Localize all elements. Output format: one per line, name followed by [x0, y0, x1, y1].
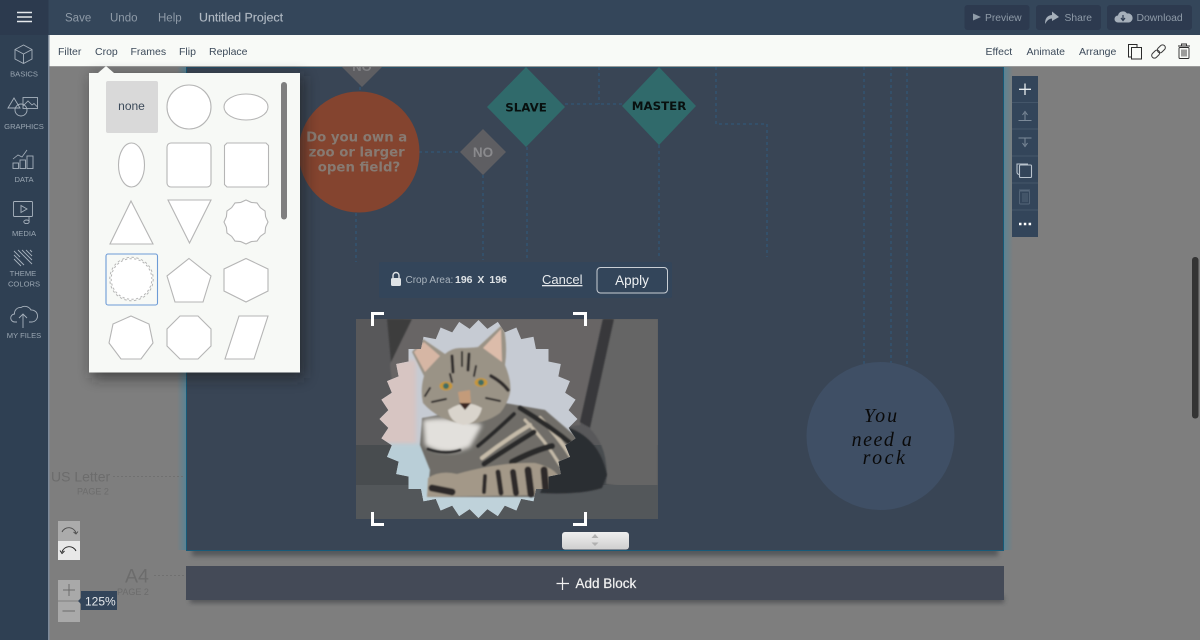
page size label: US Letter	[51, 468, 184, 496]
flowchart: SLAVE diamond	[487, 67, 565, 147]
zoom level tooltip: 125%	[85, 594, 116, 608]
cancel link: Cancel	[542, 272, 583, 287]
project title: Untitled Project	[199, 10, 284, 24]
flowchart: top NO diamond	[342, 67, 382, 87]
object tools: Animate	[1026, 46, 1065, 58]
zoom controls	[58, 580, 117, 622]
sidebar item: graphics	[4, 98, 44, 131]
share button: Share	[1064, 13, 1092, 24]
icon: add	[1019, 84, 1031, 95]
cat photo: bright area inside the starburst crop	[380, 320, 578, 518]
crop toolbar	[379, 262, 672, 298]
vertical scrollbar	[1192, 257, 1198, 418]
add block bar	[186, 566, 1004, 603]
object tools: Arrange	[1079, 46, 1117, 58]
save undo help menu	[65, 12, 182, 24]
left sidebar	[0, 35, 50, 640]
image tools: Crop	[95, 46, 118, 58]
cat photo: dimmed area outside the crop	[356, 319, 658, 519]
sidebar item: data: DATA	[14, 175, 34, 184]
download button: Download	[1136, 13, 1183, 24]
sidebar item: basics	[10, 45, 38, 78]
shape option: none: none	[118, 99, 145, 113]
shape option: none	[106, 81, 158, 133]
object tools	[986, 46, 1117, 58]
save undo help menu: Undo	[110, 12, 138, 24]
icon: copy	[1128, 44, 1142, 59]
page size label: A4: PAGE 2	[117, 587, 149, 597]
share button	[1036, 5, 1101, 30]
page size label: A4: A4	[125, 566, 149, 588]
image tools: Frames	[130, 46, 166, 58]
block tools panel	[1012, 76, 1038, 237]
page size label: US Letter: PAGE 2	[77, 486, 109, 496]
rock circle with handwritten note	[806, 362, 954, 510]
flowchart: MASTER diamond	[622, 67, 696, 145]
flowchart: zoo question circle: Do you own a	[306, 130, 407, 146]
apply button	[597, 268, 668, 293]
sidebar item: data	[13, 150, 34, 184]
image tools: Filter	[58, 46, 82, 58]
icon: duplicate	[1017, 164, 1032, 178]
object tools: Effect	[986, 46, 1012, 58]
icon: trash	[1178, 44, 1190, 58]
icon: disabled trash	[1019, 190, 1030, 204]
icon: move up	[1018, 112, 1032, 120]
sidebar item: media	[12, 202, 37, 238]
flowchart: top NO diamond: NO	[352, 59, 372, 74]
shape option: selected box	[106, 254, 158, 305]
top bar	[0, 0, 1200, 35]
image tools	[58, 46, 248, 58]
flowchart: zoo question circle: zoo or larger	[309, 146, 405, 160]
document page	[177, 67, 1013, 556]
sidebar item: basics: BASICS	[10, 70, 38, 78]
preview button	[964, 5, 1030, 30]
sidebar item: my files: MY FILES	[7, 331, 41, 340]
flowchart: NO diamond: NO	[473, 145, 493, 160]
flowchart: zoo question circle: open field?	[318, 160, 400, 176]
sidebar item: theme colors: COLORS	[8, 280, 40, 288]
icon: more	[1019, 223, 1031, 225]
save undo help menu: Save	[65, 12, 91, 24]
save undo help menu: Help	[158, 12, 182, 24]
redo and undo buttons	[58, 521, 80, 560]
sidebar item: media: MEDIA	[12, 229, 37, 238]
block resize handle	[562, 532, 629, 550]
sidebar item: my files	[7, 306, 41, 340]
image tools: Replace	[209, 46, 248, 58]
sidebar item: graphics: GRAPHICS	[4, 122, 44, 131]
flowchart connectors	[356, 67, 907, 382]
sidebar item: theme colors	[8, 250, 40, 288]
apply button: Apply	[615, 273, 649, 288]
preview button: Preview	[985, 13, 1022, 24]
rock circle with handwritten note: rock	[863, 447, 907, 469]
page size label: A4	[117, 566, 185, 597]
rock circle with handwritten note: You	[864, 405, 899, 427]
hamburger menu	[0, 0, 48, 35]
crop area label: Crop Area:	[406, 275, 453, 286]
add block bar: Add Block	[576, 576, 637, 591]
icon: link	[1151, 44, 1166, 59]
image tools: Flip	[179, 46, 196, 58]
popup scrollbar	[281, 82, 287, 220]
flowchart: SLAVE diamond: SLAVE	[505, 100, 547, 114]
crop corner handles	[372, 314, 586, 524]
page size label: US Letter: US Letter	[51, 468, 110, 484]
icon: move down	[1018, 138, 1032, 146]
crop shape popup	[89, 66, 304, 378]
download button	[1107, 5, 1192, 30]
flowchart: MASTER diamond: MASTER	[632, 99, 686, 113]
flowchart: zoo question circle	[298, 92, 420, 212]
sidebar item: theme colors: THEME	[10, 269, 36, 278]
icon: lock	[391, 272, 401, 286]
object toolbar	[48, 35, 1200, 67]
crop dimensions: 196 X 196	[455, 274, 507, 286]
shape options grid	[109, 85, 268, 359]
flowchart: NO diamond	[460, 129, 506, 175]
rock circle with handwritten note: need a	[852, 429, 913, 451]
